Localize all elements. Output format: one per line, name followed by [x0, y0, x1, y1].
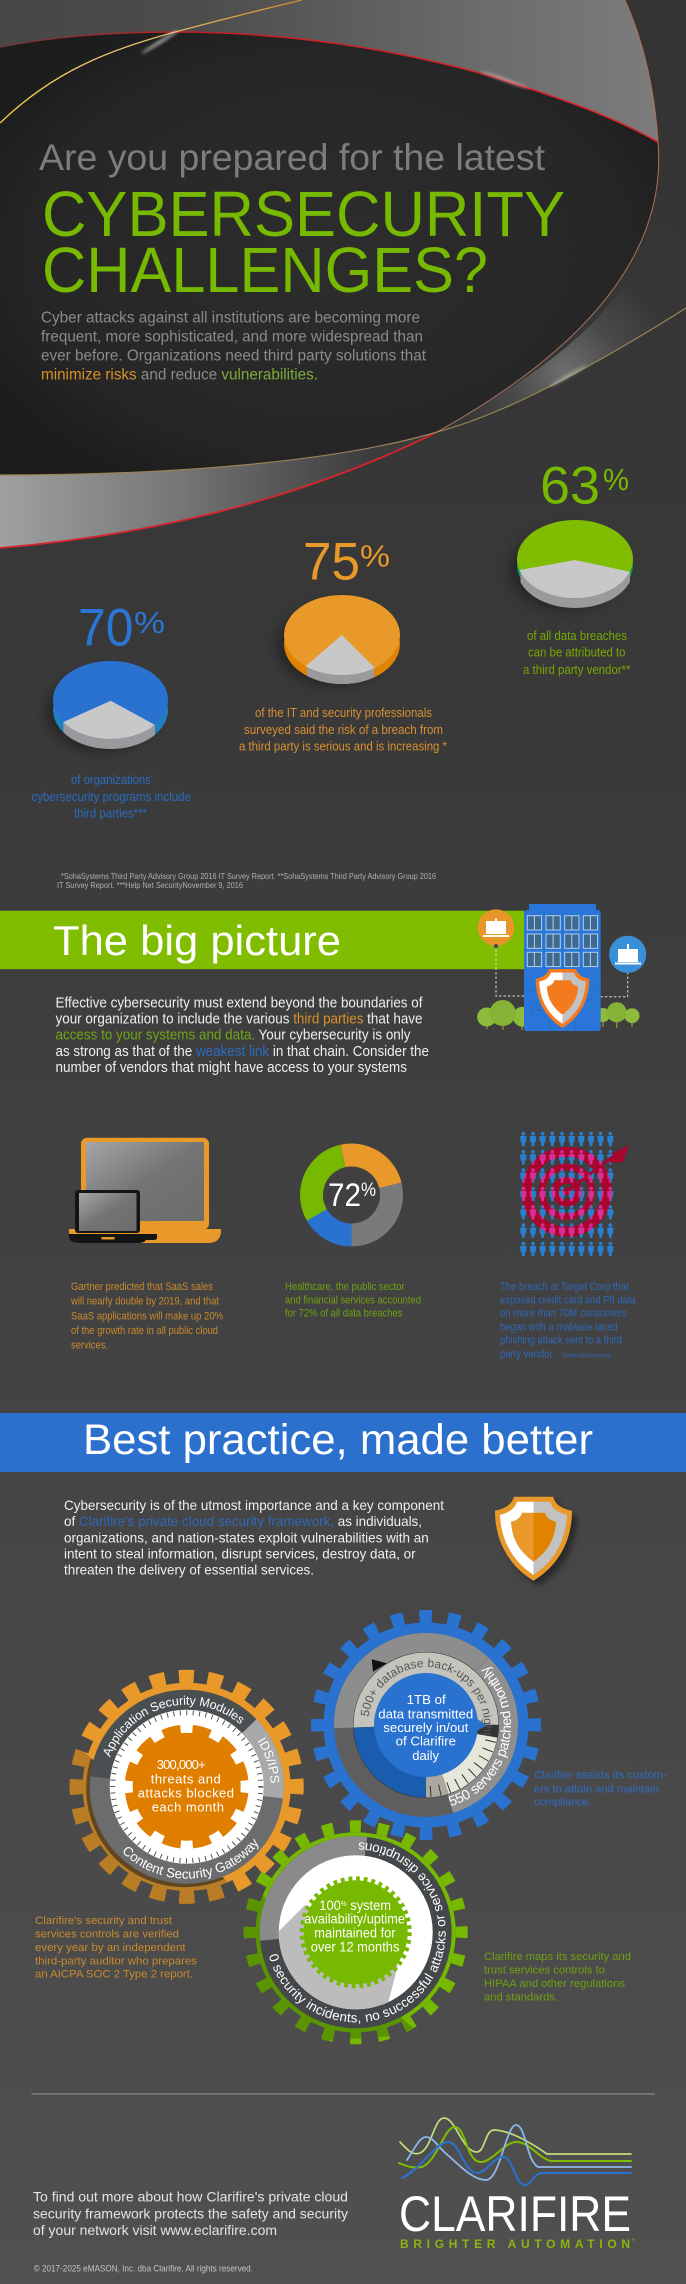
gear: green	[244, 1820, 468, 2044]
text: Target breach: phishing attack sent to a third	[500, 1335, 622, 1347]
text: healthcare breaches: and financial services accounted	[285, 1294, 421, 1306]
hero intro paragraph: frequent, more sophisticated, and more widespread than	[41, 329, 423, 346]
stat: 75%: %	[360, 539, 390, 574]
hero heading: CYBERSECURITY	[42, 178, 565, 250]
gear text: 1TB: of Clarifire	[396, 1734, 456, 1749]
gear text: 1TB: data transmitted	[378, 1706, 473, 1721]
text: compliance assist: compliance.	[534, 1797, 592, 1809]
text: HIPAA mapping: and standards.	[484, 1991, 558, 2003]
text: Target breach	[500, 1281, 636, 1360]
text: Target breach: began with a malware laced	[500, 1321, 618, 1333]
arc label: content security gateway: Content Security Gateway	[124, 1838, 259, 1879]
gear text: uptime: over 12 months	[311, 1940, 400, 1955]
text: Target breach: The breach at Target Corp that	[500, 1281, 629, 1293]
gear: blue	[311, 1610, 541, 1840]
logo waves	[399, 2118, 631, 2185]
best practice paragraph: organizations, and nation-states exploit vulnerabilities with an	[64, 1529, 429, 1545]
text: SOC 2 audit	[35, 1915, 198, 1981]
best practice paragraph: of Clarifire's private cloud security framework, as individuals,	[64, 1513, 422, 1529]
text: Gartner SaaS	[70, 1281, 223, 1352]
footer call to action: of your network visit www.eclarifire.com	[33, 2222, 277, 2238]
text: Gartner SaaS: services.	[71, 1340, 108, 1352]
hero intro paragraph: minimize risks and reduce vulnerabilities.	[41, 366, 318, 383]
logo: Clarifire: BRIGHTER AUTOMATION	[400, 2237, 630, 2251]
caption: 75%	[239, 706, 447, 754]
arc label: IDS/IPS: IDS/IPS	[258, 1737, 280, 1783]
logo: Clarifire: CLARIFIRE	[399, 2186, 631, 2242]
gear text: 1TB: 1TB of	[407, 1692, 446, 1707]
caption: 63%	[523, 629, 631, 677]
arc label: application security modules: Application Security Modules	[104, 1696, 244, 1758]
text: healthcare breaches: Healthcare, the public sector	[285, 1281, 405, 1293]
text: Gartner SaaS: SaaS applications will make up 20%	[71, 1310, 223, 1322]
arc label: servers patched: 550 servers patched monthly	[448, 1667, 512, 1806]
caption: 70%: of organizations'	[71, 773, 153, 787]
gear text: uptime	[304, 1898, 405, 1955]
footer call to action: To find out more about how Clarifire's private cloud	[33, 2189, 348, 2205]
text: compliance assist	[534, 1769, 667, 1809]
banner: best practice: Best practice, made better	[83, 1416, 593, 1464]
gear text: 300,000+	[138, 1757, 234, 1815]
text: SOC 2 audit: Clarifire's security and trust	[35, 1915, 172, 1927]
banner: best practice	[0, 1413, 686, 1472]
text: Target breach: on more than 70M consumers	[500, 1308, 627, 1320]
hero heading: CHALLENGES?	[42, 234, 488, 306]
stat: 70%	[32, 599, 191, 821]
hero intro paragraph: ever before. Organizations need third party solutions that	[41, 348, 427, 365]
text: compliance assist: ers to attain and maintain	[534, 1783, 659, 1795]
inner ring segments	[353, 1652, 499, 1798]
best practice paragraph: Cybersecurity is of the utmost importance and a key component	[64, 1497, 444, 1513]
gear text: 1TB: daily	[412, 1748, 439, 1763]
stat: 70%: %	[134, 605, 165, 640]
caption: 75%: of the IT and security professionals	[255, 706, 432, 720]
footnote sources: IT Survey Report. ***Help Net SecurityNovember 9, 2016	[57, 880, 243, 890]
gear text: 300,000+: 300,000+	[157, 1757, 206, 1772]
hero heading: Are you prepared for the latest	[39, 137, 546, 178]
pie chart: 70%	[46, 661, 168, 752]
icon: blue vendor balloon	[609, 936, 646, 973]
arc label: database back-ups: 500+ database back-ups per night	[360, 1658, 493, 1736]
hero swoosh graphic	[0, 0, 686, 548]
caption: 75%: surveyed said the risk of a breach from	[244, 723, 443, 737]
text: Target breach: exposed credit card and PII data	[500, 1294, 636, 1306]
gear text: uptime: maintained for	[314, 1926, 396, 1941]
stat: 75%	[239, 532, 447, 754]
text: Target breach: KrebsOnSecurity	[563, 1352, 611, 1359]
building windows	[527, 916, 598, 967]
footnote sources	[57, 871, 436, 890]
hero heading	[39, 137, 565, 306]
stat: 70%: 70	[78, 599, 133, 658]
gear text: uptime: system	[347, 1898, 391, 1913]
stat: 63%: 63	[540, 456, 600, 515]
gear text: 1TB: securely in/out	[383, 1720, 469, 1735]
pie chart: 63%	[510, 520, 633, 610]
pie chart: 75%	[277, 595, 400, 686]
gear text: 300,000+: each month	[152, 1800, 224, 1815]
text: SOC 2 audit: services controls are verified	[35, 1928, 179, 1940]
arc label: security incidents: 0 security incidents, no successful attacks or service disruptions	[270, 1842, 446, 2024]
caption: 70%	[32, 773, 191, 821]
gear text: 300,000+: threats and	[151, 1771, 221, 1786]
copyright: © 2017-2025 eMASON, Inc. dba Clarifire. All rights reserved.	[34, 2264, 253, 2274]
big picture paragraph: access to your systems and data. Your cybersecurity is only	[56, 1028, 411, 1044]
gear text: uptime: 100	[319, 1898, 342, 1913]
caption: 70%: cybersecurity programs include	[32, 790, 191, 804]
big picture paragraph: number of vendors that might have access to your systems	[56, 1060, 407, 1076]
ring segments	[262, 1839, 449, 2026]
text: Gartner SaaS: of the growth rate in all public cloud	[71, 1325, 218, 1337]
text: Gartner SaaS: will nearly double by 2019, and that	[70, 1296, 220, 1308]
best practice paragraph: threaten the delivery of essential services.	[64, 1561, 314, 1577]
stat: 75%: 75	[303, 532, 360, 591]
ring segments	[64, 1664, 310, 1910]
gear text: 300,000+: attacks blocked	[138, 1785, 234, 1800]
footnote sources: *SohaSystems Third Party Advisory Group 2016 IT Survey Report. **SohaSystems Third Party Advisory Group 2016	[61, 871, 436, 881]
dial ticks	[430, 1740, 496, 1797]
icon: office building with shield and vendors	[477, 904, 646, 1031]
gear text: 1TB	[378, 1692, 473, 1763]
gear text: uptime: availability/uptime	[304, 1911, 405, 1926]
gear text: uptime: %	[341, 1901, 347, 1908]
text: SOC 2 audit: an AICPA SOC 2 Type 2 report.	[35, 1969, 193, 1981]
banner: the big picture: The big picture	[53, 917, 341, 964]
icon: orange shield	[495, 1497, 577, 1586]
hero intro paragraph	[41, 310, 427, 383]
text: healthcare breaches	[285, 1281, 421, 1320]
logo: Clarifire: ®	[632, 2237, 635, 2242]
icon: orange vendor balloon	[478, 909, 514, 948]
donut chart: 72%	[297, 1140, 406, 1250]
best practice paragraph	[64, 1497, 444, 1577]
caption: 63%: can be attributed to	[528, 646, 626, 660]
footer call to action	[33, 2189, 348, 2238]
big picture paragraph: as strong as that of the weakest link in that chain. Consider the	[56, 1044, 429, 1060]
text: healthcare breaches: for 72% of all data breaches	[285, 1308, 403, 1320]
caption: 70%: third parties***	[74, 807, 147, 821]
text: compliance assist: Clarifire assists its custom-	[534, 1769, 667, 1781]
text: HIPAA mapping: HIPAA and other regulations	[484, 1978, 626, 1990]
big picture paragraph	[56, 995, 429, 1076]
stat: 63%	[510, 456, 633, 677]
icon: crowd with target	[520, 1132, 629, 1256]
donut chart: 72%: 72	[328, 1177, 361, 1213]
text: SOC 2 audit: third-party auditor who prepares	[35, 1955, 198, 1967]
text: Target breach: party vendor	[500, 1348, 553, 1360]
dashed connectors	[496, 945, 628, 997]
icon: trees	[477, 1000, 640, 1030]
icon: building shield	[536, 969, 589, 1028]
caption: 63%: a third party vendor**	[523, 663, 631, 677]
big picture paragraph: Effective cybersecurity must extend beyond the boundaries of	[56, 995, 423, 1011]
text: HIPAA mapping: trust services controls to	[484, 1965, 605, 1977]
text: HIPAA mapping: Clarifire maps its security and	[484, 1951, 631, 1963]
banner: the big picture	[0, 911, 524, 969]
footer call to action: security framework protects the safety and security	[33, 2205, 348, 2221]
donut chart: 72%: %	[361, 1180, 376, 1201]
building	[524, 904, 601, 1031]
big picture paragraph: your organization to include the various third parties that have	[56, 1011, 422, 1027]
stat: 63%: %	[603, 462, 629, 497]
text: SOC 2 audit: every year by an independent	[35, 1942, 186, 1954]
caption: 75%: a third party is serious and is increasing *	[239, 740, 447, 754]
best practice paragraph: intent to steal information, disrupt services, destroy data, or	[64, 1545, 416, 1561]
logo: Clarifire	[399, 2118, 635, 2251]
gear: orange	[70, 1670, 304, 1904]
outer ring segments	[310, 1609, 542, 1841]
text: Gartner SaaS: Gartner predicted that SaaS sales	[71, 1281, 213, 1293]
text: HIPAA mapping	[484, 1951, 631, 2003]
hero intro paragraph: Cyber attacks against all institutions are becoming more	[41, 310, 420, 327]
icon: laptop and tablet	[69, 1138, 221, 1243]
caption: 63%: of all data breaches	[527, 629, 627, 643]
